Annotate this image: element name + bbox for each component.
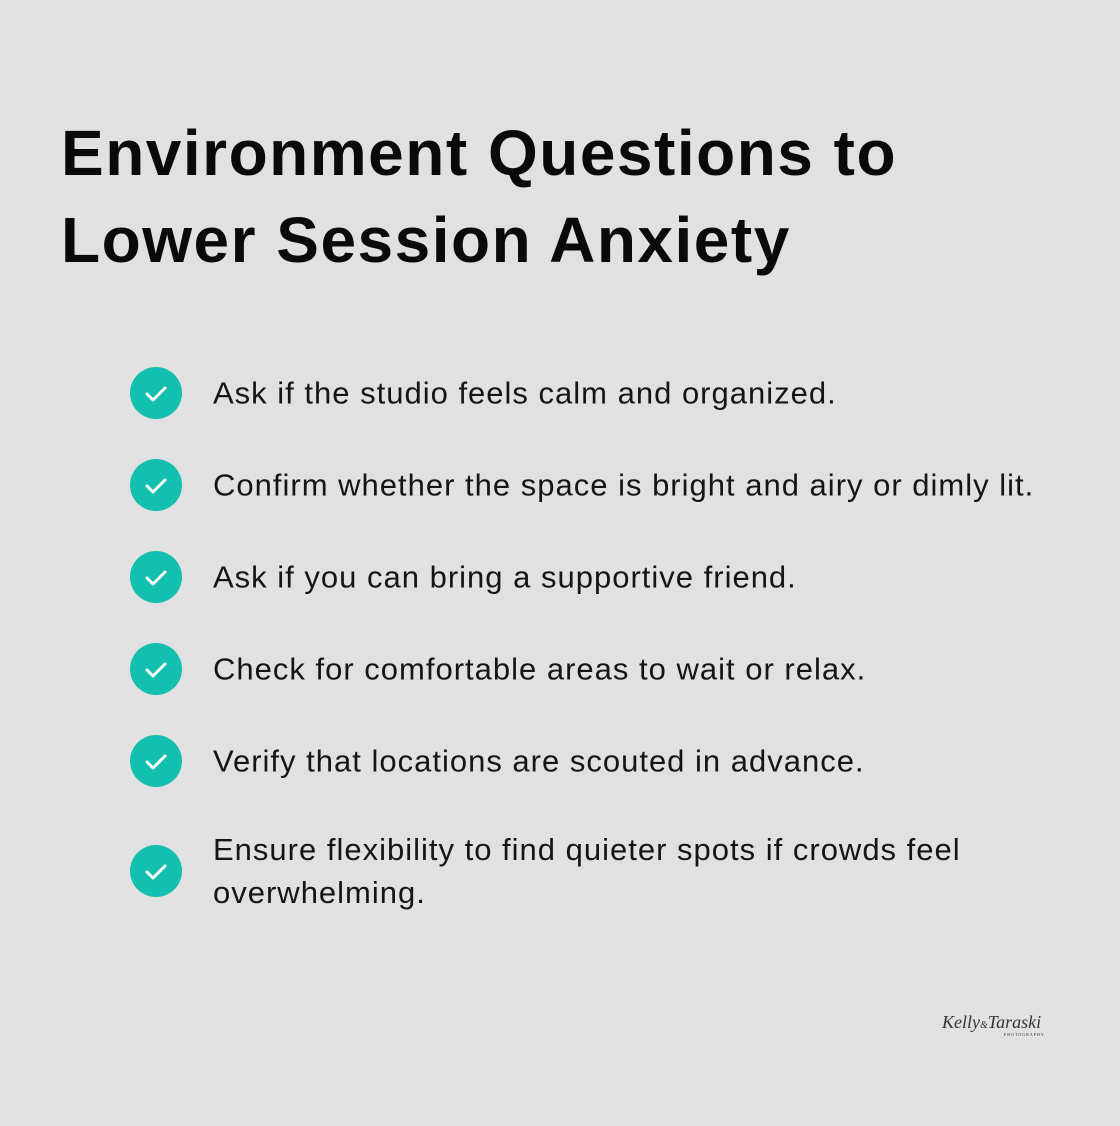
logo signature: PHOTOGRAPHY xyxy=(1004,1032,1045,1037)
logo signature: Kelly&Taraski xyxy=(942,1012,1041,1032)
item 2 xyxy=(130,459,1034,511)
item 5 xyxy=(130,735,865,787)
item 6 xyxy=(130,832,961,910)
item 1: Ask if the studio feels calm and organized. xyxy=(213,376,837,410)
item 4 xyxy=(130,643,866,695)
item 2: Confirm whether the space is bright and airy or dimly lit. xyxy=(213,468,1034,502)
title: Environment Questions to xyxy=(61,117,897,189)
item 6: overwhelming. xyxy=(213,875,426,910)
item 5: Verify that locations are scouted in advance. xyxy=(213,744,865,778)
item 1 xyxy=(130,367,837,419)
title: Lower Session Anxiety xyxy=(61,204,791,276)
item 4: Check for comfortable areas to wait or relax. xyxy=(213,652,866,686)
title xyxy=(61,117,897,276)
item 3 xyxy=(130,551,797,603)
item 6: Ensure flexibility to find quieter spots if crowds feel xyxy=(213,832,961,867)
item 3: Ask if you can bring a supportive friend. xyxy=(213,560,797,594)
